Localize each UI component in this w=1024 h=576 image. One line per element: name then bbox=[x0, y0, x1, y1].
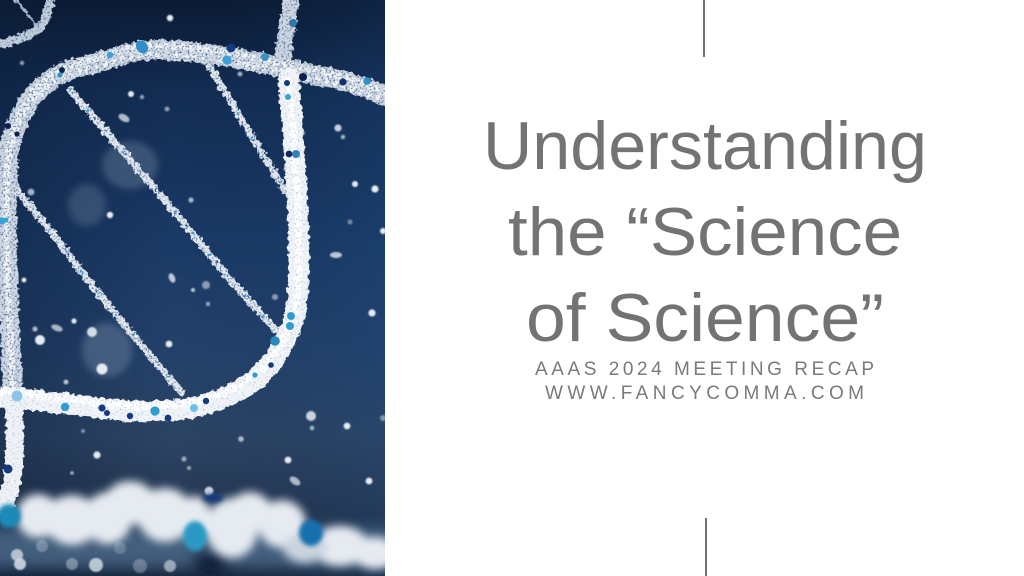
subtitle: AAAS 2024 MEETING RECAP bbox=[535, 359, 874, 380]
strands behind: upper section bbox=[6, 0, 392, 400]
blurred foreground haze bbox=[0, 528, 420, 570]
bokeh beads at bottom bbox=[11, 540, 176, 573]
subtitle: WWW.FANCYCOMMA.COM bbox=[545, 383, 864, 404]
small strand top left bbox=[0, 0, 50, 43]
subtitle bbox=[535, 359, 874, 404]
divider line bottom bbox=[705, 518, 707, 576]
snow particles bbox=[20, 15, 386, 495]
DNA helix bbox=[0, 0, 392, 507]
title: of Science” bbox=[526, 280, 884, 356]
title: the “Science bbox=[508, 194, 902, 270]
out-of-focus bokeh circles bbox=[68, 141, 158, 377]
photo background bbox=[0, 0, 385, 576]
panel: DNA photograph bbox=[0, 0, 420, 576]
blurred foreground beads bbox=[16, 481, 397, 569]
divider line top bbox=[703, 0, 705, 57]
blue foreground beads bbox=[0, 494, 323, 551]
title: Understanding bbox=[483, 108, 927, 184]
title bbox=[483, 108, 927, 356]
strands front: lower section bbox=[0, 73, 299, 507]
accent beads bbox=[0, 19, 371, 474]
rungs bbox=[15, 67, 287, 393]
